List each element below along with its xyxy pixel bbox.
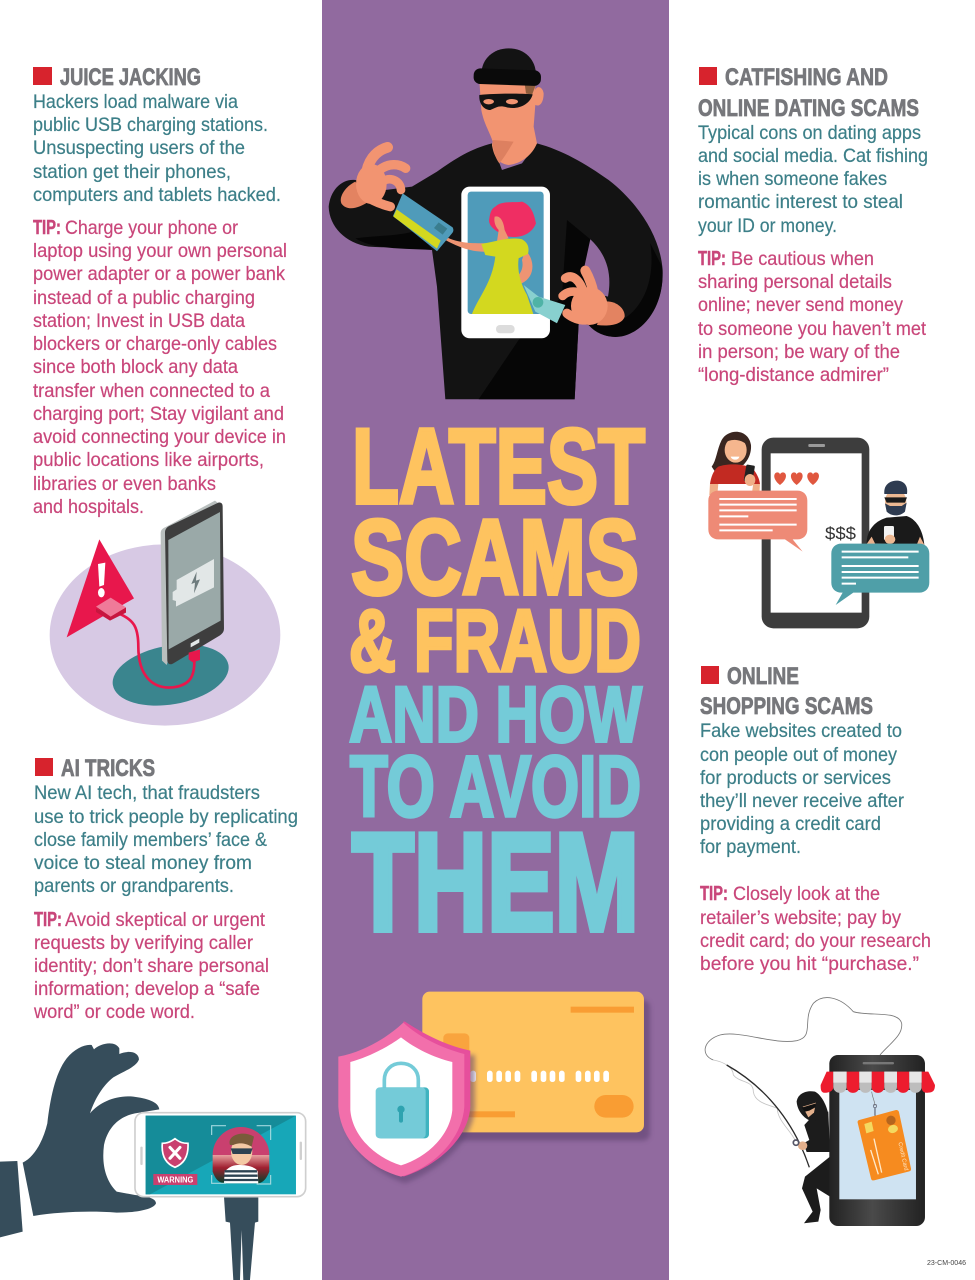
illustration: phone charging at public station [50,501,280,726]
description [34,782,298,897]
fishing line [705,998,902,1060]
description: Fake websites created to [700,720,902,742]
illustration: thief phishing a credit card from a phone store [705,998,935,1226]
tip: in person; be wary of the [698,341,900,363]
woman with phone [709,432,760,495]
banknote [524,285,565,323]
icon: red square [35,758,53,776]
panel: AI tricks [0,755,306,1280]
tip: information; develop a “safe [34,978,260,1000]
tip: transfer when connected to a [33,380,270,402]
description: computers and tablets hacked. [33,184,281,206]
dollar signs: $$$ [825,523,856,543]
description: is when someone fakes [698,168,887,190]
tip: TIP: [34,909,62,931]
phone on chest [461,187,550,338]
tip: power adapter or a power bank [33,263,285,285]
description: Hackers load malware via [33,91,238,113]
tip [700,883,931,975]
tip: TIP: [698,248,726,270]
tip: TIP: [700,883,728,905]
illustration: credit card and security shield [338,992,650,1183]
icon: red square [699,67,717,85]
shield shadow [343,1028,475,1183]
tip: laptop using your own personal [33,240,287,262]
tip: sharing personal details [698,271,892,293]
tip: to someone you haven’t met [698,318,927,340]
tip [33,909,269,1023]
striped awning [821,1072,935,1093]
tip: Charge your phone or [65,217,238,239]
teal base [108,636,234,714]
description [698,122,928,237]
facial scan portrait [212,1126,271,1184]
description: close family members’ face & [34,829,267,851]
heading [698,64,919,122]
neck shadow [493,140,514,163]
beanie [473,48,541,86]
description: Unsuspecting users of the [33,137,245,159]
connector [96,598,126,621]
title: latest scams and fraud and how to avoid them: AND HOW [349,670,642,758]
illustration: masked thief holding phone [329,48,663,399]
masked man with phone [866,481,925,546]
card shadow [428,1000,650,1141]
panel: juice jacking [33,64,287,726]
hook [872,1092,878,1117]
tip: online; never send money [698,294,903,316]
title: latest scams and fraud and how to avoid them: & FRAUD [349,591,641,690]
description: providing a credit card [700,813,881,835]
woman on phone screen [444,202,536,314]
tip: Be cautious when [731,248,874,270]
thief [793,1091,830,1223]
hooked orange credit card [858,1110,911,1180]
warning shield [162,1139,188,1167]
tip: retailer’s website; pay by [700,907,901,929]
plug [189,649,200,662]
warning label: WARNING [157,1176,193,1185]
teal speech bubble [831,544,929,605]
fishing rod [727,1065,809,1167]
tip: “long-distance admirer” [698,364,889,386]
code label: 23-CM-0046 [927,1258,966,1267]
description: Typical cons on dating apps [698,122,921,144]
shield [338,1022,470,1177]
phone [762,438,869,628]
tip: word” or code word. [33,1001,195,1023]
pink speech bubble [708,491,807,552]
eye mask [479,94,533,110]
title: latest scams and fraud and how to avoid them: THEM [352,805,639,960]
arm shadows [355,220,663,399]
tip [33,217,287,518]
warning triangle [67,539,134,637]
right hand [563,271,625,326]
hand [23,1043,159,1216]
description [33,91,281,206]
tip: credit card; do your research [700,930,931,952]
description: for payment. [700,836,801,858]
description: use to trick people by replicating [34,806,298,828]
tip: instead of a public charging [33,287,255,309]
lilac ellipse [50,544,280,726]
title: latest scams and fraud and how to avoid them [349,406,645,960]
thief body and arms [329,143,663,399]
heading [700,663,873,720]
tip: charging port; Stay vigilant and [33,403,284,425]
heading: ONLINE [727,663,799,690]
title: latest scams and fraud and how to avoid them: LATEST [352,406,645,526]
description: for products or services [700,767,891,789]
thief standing behind phone [224,1197,258,1280]
panel: online shopping scams [700,663,935,1226]
left hand [341,147,406,208]
tip: station; Invest in USB data [33,310,245,332]
description: parents or grandparents. [34,875,234,897]
illustration: hand holding phone with deepfake [0,1043,306,1280]
tip: identity; don’t share personal [34,955,269,977]
description: New AI tech, that fraudsters [34,782,260,804]
panel: catfishing and online dating scams [698,64,929,628]
tip: avoid connecting your device in [33,426,286,448]
tip: public locations like airports, [33,449,264,471]
fishing line lower loops [713,1060,795,1140]
tip: TIP: [33,217,61,239]
tip: before you hit “purchase.” [700,953,919,975]
description: your ID or money. [698,215,837,237]
description: and social media. Cat fishing [698,145,928,167]
hair [525,82,537,95]
description: they’ll never receive after [700,790,904,812]
tip: libraries or even banks [33,473,216,495]
head and neck [479,77,544,165]
cable [120,614,194,688]
title: latest scams and fraud and how to avoid them: SCAMS [351,497,639,617]
horizontal phone [135,1113,306,1197]
description: voice to steal money from [34,852,252,874]
bank card [422,992,644,1132]
credit card [393,193,453,251]
sleeve [0,1161,23,1237]
tip: requests by verifying caller [34,932,253,954]
hearts [774,472,819,485]
hooked orange credit card: Credit Card [896,1142,909,1171]
phone [161,501,224,665]
phone [829,1055,925,1226]
description [700,720,904,858]
tip: Avoid skeptical or urgent [65,909,266,931]
heading: JUICE JACKING [60,64,201,91]
description: romantic interest to steal [698,191,903,213]
description: public USB charging stations. [33,114,268,136]
panel: central purple column [322,0,669,1280]
illustration: dating scam chat [708,432,929,628]
padlock [376,1063,429,1138]
tip [698,248,927,386]
description: con people out of money [700,744,897,766]
tip: blockers or charge-only cables [33,333,277,355]
heading: SHOPPING SCAMS [700,693,873,720]
gap between arm and torso [584,239,609,297]
description: station get their phones, [33,161,231,183]
icon: red square [701,666,719,684]
tip: Closely look at the [733,883,880,905]
heading: CATFISHING AND [725,64,888,91]
tip: since both block any data [33,356,238,378]
title: latest scams and fraud and how to avoid them: TO AVOID [350,739,641,835]
heading: AI TRICKS [61,755,155,782]
icon: red square [33,67,52,85]
tip: and hospitals. [33,496,144,518]
